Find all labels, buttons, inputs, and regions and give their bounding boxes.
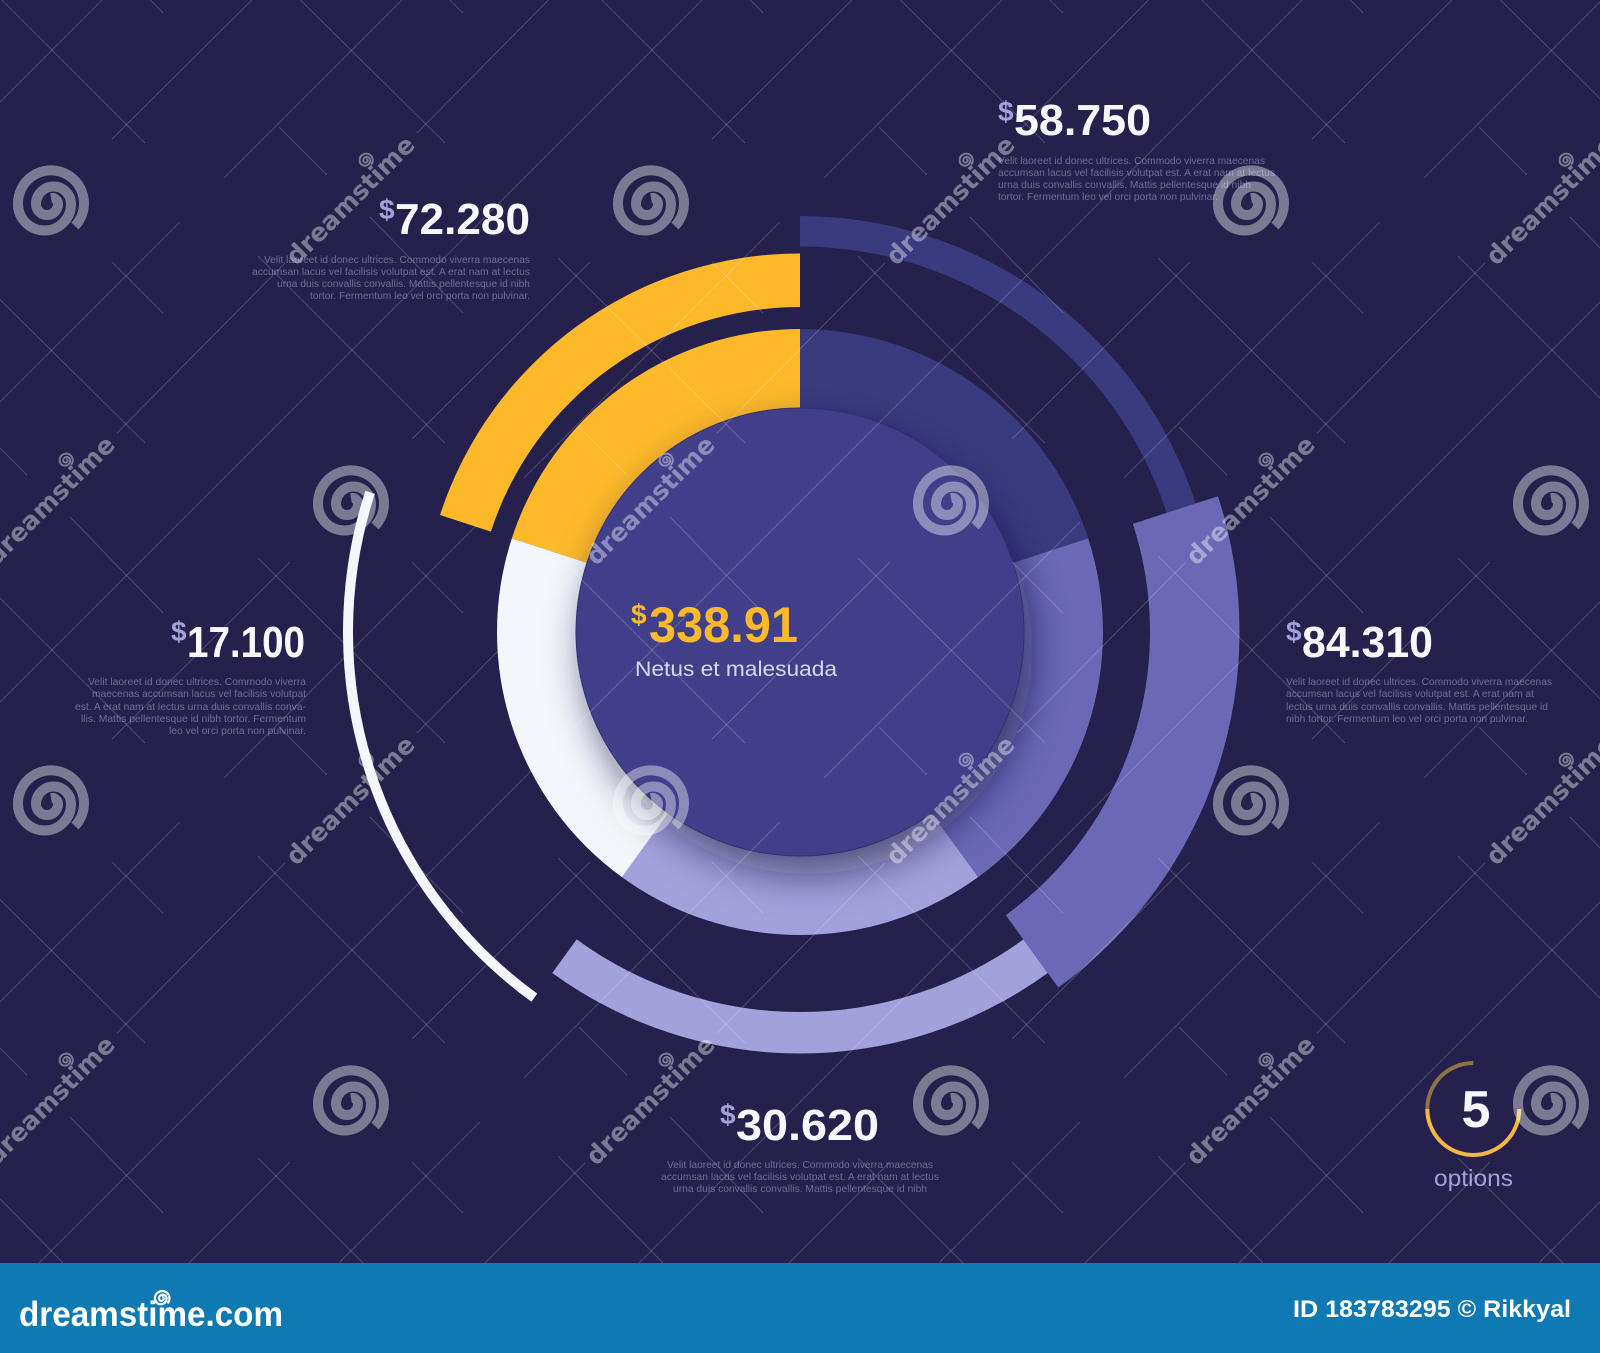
callout: 17.100: leo vel orci porta non pulvinar.: [169, 725, 306, 737]
callout: 17.100: 17.100: [187, 618, 305, 667]
center value: 338.91: [649, 597, 798, 653]
watermark wordmarks: dreamstime: [1180, 1030, 1321, 1171]
outer arc: white: [348, 492, 534, 998]
callout: 58.750: accumsan lacus vel facilisis volutpat est. A erat nam at lectus: [998, 167, 1275, 179]
callout: 58.750: tortor. Fermentum leo vel orci porta non pulvinar.: [998, 191, 1218, 203]
callout: 58.750: [998, 96, 1275, 203]
watermark wordmarks: dreamstime: [580, 1030, 721, 1171]
watermark spirals: [18, 170, 1584, 1131]
callout: 84.310: [1286, 616, 1552, 725]
outer arc: pale violet: [552, 939, 1048, 1053]
badge ring: dim part: [1427, 1063, 1473, 1109]
callout: 30.620: Velit laoreet id donec ultrices. Commodo viverra maecenas: [667, 1159, 933, 1171]
watermark wordmarks: dreamstime: [1180, 430, 1321, 571]
center disc shadow: [584, 426, 1032, 874]
callout: 17.100: llis. Mattis pellentesque id nibh tortor. Fermentum: [81, 713, 306, 725]
footer banner: [0, 1263, 1600, 1353]
ring segment: navy: [800, 329, 1088, 632]
callout: 17.100: $: [171, 616, 187, 647]
banner bar: [0, 1263, 1600, 1353]
callout: 17.100: Velit laoreet id donec ultrices. Commodo viverra: [88, 676, 306, 688]
callout: 84.310: $: [1286, 616, 1302, 647]
callout: 72.280: 72.280: [395, 195, 530, 244]
banner image id: ID 183783295 © Rikkyal: [1293, 1296, 1571, 1323]
outer arc: navy: [800, 216, 1196, 513]
ring segment: yellow: [512, 329, 800, 632]
callout: 72.280: $: [379, 194, 395, 225]
callout: 17.100: est. A erat nam at lectus urna duis convallis conva-: [75, 701, 306, 713]
callout: 30.620: accumsan lacus vel facilisis volutpat est. A erat nam at lectus: [661, 1171, 939, 1183]
callout: 58.750: $: [998, 96, 1014, 127]
callout: 84.310: 84.310: [1302, 618, 1433, 667]
badge number: 5: [1462, 1081, 1490, 1139]
banner logo spiral: [155, 1291, 169, 1304]
watermark wordmarks: dreamstime: [580, 430, 721, 571]
callout: 84.310: nibh tortor. Fermentum leo vel orci porta non pulvinar.: [1286, 713, 1528, 725]
callout: 58.750: 58.750: [1014, 96, 1151, 145]
badge caption: options: [1434, 1165, 1513, 1191]
ring segment: violet: [800, 538, 1103, 877]
options badge: [1427, 1063, 1519, 1191]
watermark wordmarks: dreamstime: [280, 130, 421, 271]
callout: 30.620: [661, 1099, 939, 1195]
banner logo text: dreamstime.com: [19, 1295, 283, 1334]
callout: 72.280: Velit laoreet id donec ultrices. Commodo viverra maecenas: [264, 254, 530, 266]
center caption: Netus et malesuada: [635, 658, 837, 681]
center currency sign: $: [631, 599, 647, 630]
callout: 58.750: Velit laoreet id donec ultrices. Commodo viverra maecenas: [998, 155, 1265, 167]
watermark wordmarks: dreamstime: [280, 730, 421, 871]
callout: 84.310: lectus urna duis convallis convallis. Mattis pellentesque id: [1286, 701, 1548, 713]
watermark wordmarks: [0, 130, 1600, 1171]
callout: 84.310: accumsan lacus vel facilisis volutpat est. A erat nam at: [1286, 688, 1534, 700]
callout: 17.100: [75, 616, 306, 737]
outer arc: violet: [1006, 496, 1239, 988]
callout: 72.280: [252, 194, 530, 302]
watermark wordmarks: dreamstime: [880, 130, 1021, 271]
ring segment: pale violet: [622, 632, 978, 935]
callout: 72.280: accumsan lacus vel facilisis volutpat est. A erat nam at lectus: [252, 266, 530, 278]
ring segment: white: [497, 538, 800, 877]
callout: 84.310: Velit laoreet id donec ultrices. Commodo viverra maecenas: [1286, 676, 1552, 688]
radial chart: [348, 216, 1239, 1053]
callout: 30.620: $: [720, 1099, 736, 1130]
center disc: [576, 408, 1024, 856]
callout: 58.750: urna duis convallis convallis. Mattis pellentesque id nibh: [998, 179, 1251, 191]
badge ring: bright part: [1427, 1109, 1519, 1155]
callout: 17.100: maecenas accumsan lacus vel facilisis volutpat: [92, 688, 306, 700]
callout: 30.620: 30.620: [736, 1101, 879, 1150]
watermark wordmark spirals: [60, 154, 1573, 1066]
watermark wordmarks: dreamstime: [880, 730, 1021, 871]
callout: 72.280: tortor. Fermentum leo vel orci porta non pulvinar.: [310, 290, 530, 302]
outer arc: yellow: [440, 254, 800, 532]
callout: 72.280: urna duis convallis convallis. Mattis pellentesque id nibh: [277, 278, 530, 290]
center total: [631, 597, 837, 681]
callout: 30.620: urna duis convallis convallis. Mattis pellentesque id nibh: [673, 1183, 927, 1195]
pie ring: [497, 329, 1103, 935]
